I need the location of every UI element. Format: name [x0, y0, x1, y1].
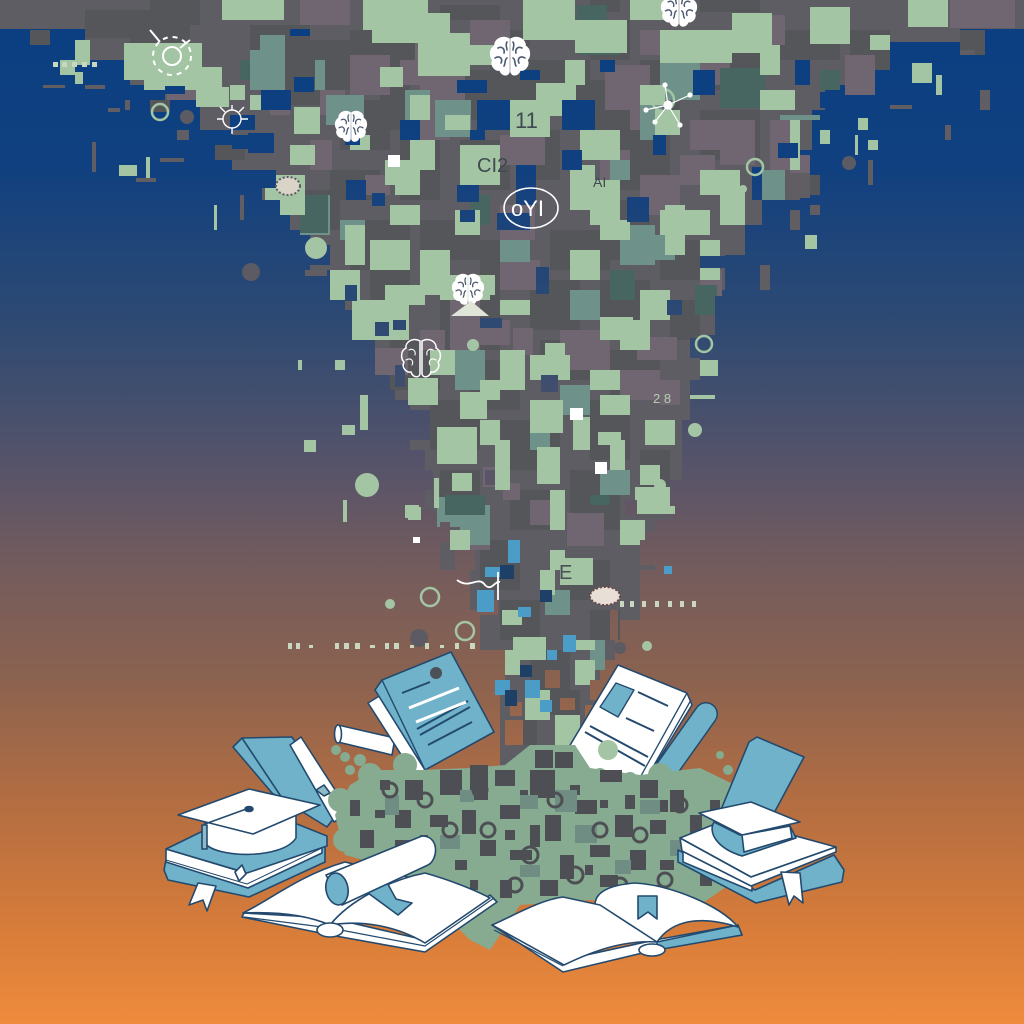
lower page block: [683, 850, 752, 891]
book stack lower cover: [164, 845, 325, 897]
right page: [330, 873, 490, 943]
icon: brain white centre: [452, 274, 484, 304]
icon: brain white left: [335, 111, 367, 141]
roll: blue capsule fill: [652, 714, 706, 790]
pile dark fragments: [350, 750, 735, 898]
AI letter fragments: AI: [593, 174, 606, 190]
stack: graduation cap on books: [164, 789, 327, 911]
icon: node network right: [644, 83, 692, 127]
front left page: [492, 897, 657, 965]
circles light around funnel: [305, 185, 747, 651]
lower page edge: [492, 925, 742, 972]
icon: textured small brain lower: [590, 587, 620, 605]
cap board: [178, 789, 320, 834]
top small book spine: [712, 822, 796, 856]
pile ring marks: [383, 783, 707, 892]
stray small blocks on the left: [75, 72, 439, 522]
icon: gear network: [150, 30, 191, 75]
open book left with scroll: [242, 836, 497, 952]
white glyph chips: [388, 155, 607, 543]
stray gray blocks on the right: [760, 50, 990, 290]
lower page edge: [242, 895, 497, 952]
mid slate green blocks: [250, 35, 820, 670]
pile edge dots: [328, 745, 755, 870]
icon: brain outline: [402, 340, 440, 377]
blue blocks near the base: [477, 540, 672, 712]
cap body: [205, 812, 296, 854]
funnel base silhouette: [0, 0, 1024, 770]
scroll body: [326, 836, 436, 905]
AI letter fragments: CI2: [477, 155, 508, 177]
icon: node network left: [217, 105, 248, 134]
left page: [243, 862, 420, 925]
ribbon on scroll: [368, 877, 412, 915]
icon: head outline with letters: oYI: [511, 196, 544, 221]
top small book cover: [699, 802, 800, 835]
book: blue back left: [233, 737, 340, 827]
scroll: small white roll: [334, 725, 395, 755]
back blue book: [720, 737, 804, 815]
icon: triangle under brain: [451, 301, 489, 316]
stray gray blocks on the left: [43, 85, 327, 276]
stack: right books: [678, 737, 844, 905]
data mosaic funnel: [0, 0, 1024, 770]
purple gray blocks: [167, 0, 1015, 550]
document: white report: [560, 665, 692, 790]
icon: brain white top: [662, 0, 696, 26]
cap button: [245, 806, 253, 812]
roll: blue capsule right outline: [652, 714, 706, 790]
top small book page: [742, 826, 792, 852]
AI letter fragments: 11: [515, 108, 538, 133]
binding foot: [639, 944, 665, 956]
navy blocks near the base: [500, 565, 552, 706]
pile of data fragments: [328, 745, 755, 950]
number fragment: 2 8: [653, 391, 671, 406]
book: blue report: [368, 652, 494, 792]
ribbon right: [781, 872, 803, 905]
tassel end: [202, 825, 207, 849]
book stack top cover: [166, 824, 327, 873]
book stack page line: [166, 848, 322, 884]
circles dark around funnel: [180, 110, 856, 654]
dark gray blocks: [30, 0, 985, 765]
stray small blocks on the right: [690, 64, 942, 399]
ring marks around funnel: [152, 89, 763, 640]
page edge lines: [244, 898, 494, 946]
pile gray-green fragments: [385, 790, 690, 877]
pile base: [335, 745, 750, 950]
icon: head outline with letters: [504, 188, 558, 228]
bottom blue book: [678, 850, 844, 903]
light green blocks: [60, 0, 948, 765]
book clasp: [235, 865, 246, 881]
page block edge: [680, 838, 836, 886]
tassel: [205, 808, 249, 848]
open book right with bookmark: [492, 883, 742, 972]
gaps showing background through mosaic: [165, 29, 832, 745]
icon: squiggle lines near base: [457, 572, 500, 600]
page edge lines: [494, 930, 563, 966]
bookmark: [638, 896, 657, 919]
book stack pages: [166, 840, 322, 888]
AI letter fragments: [477, 108, 606, 584]
scroll: white diploma upright: [290, 737, 350, 822]
dark teal blocks: [240, 5, 840, 515]
back right page: [595, 883, 738, 942]
binding foot: [317, 923, 343, 937]
fine data fragments: [53, 62, 696, 649]
icon: brain white top centre: [491, 38, 529, 75]
AI letter fragments: E: [559, 562, 572, 584]
scroll end: [323, 871, 351, 907]
icon: textured small brain left: [276, 177, 300, 195]
blue right edge: [657, 925, 742, 950]
ribbon: [189, 883, 216, 911]
big white page block: [680, 818, 836, 877]
